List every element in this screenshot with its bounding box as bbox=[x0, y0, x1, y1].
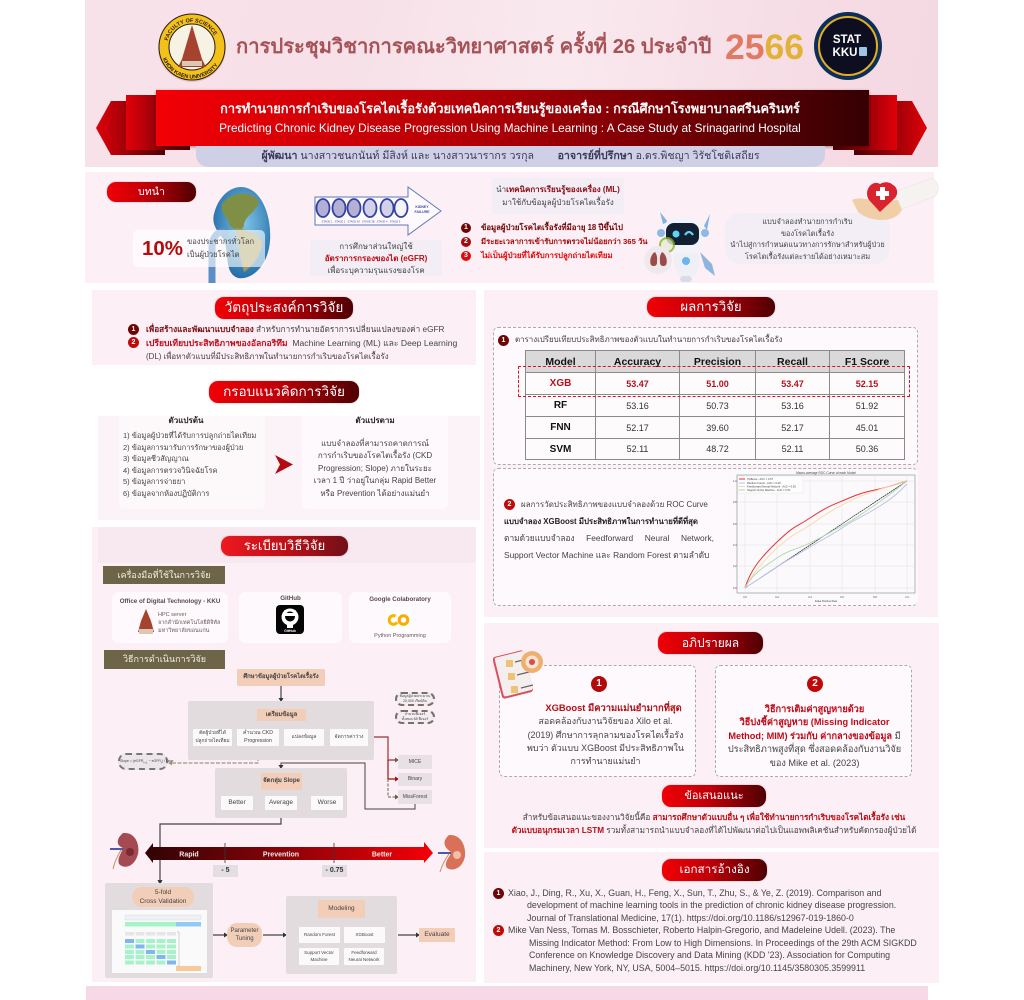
box: study CKD data: ศึกษาข้อมูลผู้ป่วยโรคไตเรื้อรัง bbox=[243, 674, 319, 680]
group: worse bbox=[311, 796, 343, 810]
panel: modeling bbox=[286, 896, 397, 974]
results table: 50.73 bbox=[706, 400, 729, 410]
heading: conceptual framework: กรอบแนวคิดการวิจัย bbox=[223, 384, 345, 399]
HPC text: มหาวิทยาลัยขอนแก่น bbox=[158, 628, 209, 634]
chart: ROC curve: 0.0 bbox=[743, 595, 747, 599]
model: SVM: Support Vector bbox=[304, 950, 334, 955]
model: SVM bbox=[299, 948, 339, 965]
heading band bbox=[98, 527, 476, 563]
heading: introduction: บทนำ bbox=[138, 186, 165, 198]
icon: diseased kidney bbox=[110, 833, 138, 870]
results table: 53.47 bbox=[781, 378, 804, 388]
diagram: k-fold bbox=[112, 910, 207, 973]
logo: STAT KKU bbox=[814, 12, 882, 80]
discussion text: สอดคล้องกับงานวิจัยของ Xilo et al. bbox=[538, 716, 673, 726]
results table: 52.17 bbox=[781, 422, 804, 432]
reference text: Missing Indicator Method: From Low to High Dimensions. In Proceedings of the 29th ACM SIGKDD bbox=[529, 938, 917, 948]
callout: model outcome bbox=[725, 213, 890, 264]
header panel bbox=[85, 0, 938, 167]
data source 1: ข้อมูลผู้ป่วยประมาณ bbox=[400, 694, 430, 698]
HPC text: HPC server bbox=[158, 612, 186, 618]
threshold -5: - 5 bbox=[221, 867, 230, 874]
label: จัดกลุ่ม Slope bbox=[263, 778, 300, 784]
label: Modeling bbox=[328, 905, 355, 912]
number badge bbox=[128, 324, 139, 335]
method: MICE bbox=[398, 755, 432, 769]
results table: Model bbox=[545, 356, 576, 368]
results table: F1 Score bbox=[845, 356, 889, 368]
criterion 3: 3 bbox=[464, 252, 468, 259]
variable list: 1) ข้อมูลผู้ป่วยที่ได้รับการปลูกถ่ายไตเทียม bbox=[123, 431, 256, 440]
box: dependent variable bbox=[302, 416, 448, 509]
label: 5-fold bbox=[155, 889, 171, 896]
step: compute progression bbox=[237, 729, 279, 746]
reference text: Journal of Translational Medicine, 17(1). https://doi.org/10.1186/s12967-019-1860-0 bbox=[527, 913, 854, 923]
criterion 2: 2 bbox=[464, 238, 468, 245]
heading: results: ผลการวิจัย bbox=[680, 299, 742, 314]
logo: STAT KKU: KKU bbox=[833, 47, 857, 59]
recommendation text: สำหรับข้อเสนอแนะของงานวิจัยนี้คือ สามารถศึกษาตัวแบบอื่น ๆ เพื่อใช้ทำนายการกำเริบของโรคไตเรื้อรัง เช่น bbox=[523, 813, 905, 822]
label bbox=[257, 709, 306, 721]
box: evaluate: Evaluate bbox=[424, 931, 450, 938]
label bbox=[318, 900, 365, 918]
dependent text: Progression; Slope) ภายในระยะ bbox=[318, 464, 432, 473]
table caption: ตารางเปรียบเทียบประสิทธิภาพของตัวแบบในทำนายการกำเริบของโรคไตเรื้อรัง bbox=[515, 335, 783, 344]
results table: FNN bbox=[550, 422, 571, 433]
number badge: 1 bbox=[497, 890, 500, 897]
method: MissForest bbox=[398, 790, 432, 804]
results table: 53.47 bbox=[626, 378, 649, 388]
chart: ROC curve: 0.4 bbox=[808, 595, 812, 599]
results table: Recall bbox=[777, 356, 808, 368]
discussion text: การทำนายแม่นยำ bbox=[570, 756, 641, 766]
heading: recommendations bbox=[662, 785, 766, 807]
group: worse: Worse bbox=[318, 799, 336, 806]
statistic caption: เป็นผู้ป่วยโรคไต bbox=[187, 250, 240, 259]
callout: machine learning bbox=[492, 178, 624, 214]
icon: colab bbox=[388, 614, 410, 626]
panel: discussion bbox=[484, 623, 939, 848]
reference text bbox=[508, 888, 896, 923]
callout: eGFR: เพื่อระบุความรุนแรงของโรค bbox=[327, 266, 425, 275]
line 1: 2 bbox=[508, 501, 511, 508]
chart: ROC curve bbox=[733, 470, 918, 603]
results table: 48.72 bbox=[706, 444, 729, 454]
number badge bbox=[807, 676, 823, 692]
step: exclude bbox=[193, 729, 232, 746]
conference title: การประชุมวิชาการคณะวิทยาศาสตร์ ครั้งที่ 26 ประจำปี bbox=[236, 36, 711, 58]
card caption: Python Programming bbox=[374, 633, 426, 639]
criterion 3 bbox=[461, 250, 613, 261]
group: better: Better bbox=[228, 799, 246, 806]
box: study CKD data bbox=[237, 669, 325, 686]
recommendation text: ตัวแบบอนุกรมเวลา LSTM รวมทั้งสามารถนำแบบจำลองที่ได้ไปพัฒนาต่อไปเป็นแอพพลิเคชันสำหรับคัดกรองผู้ป่วยได้ bbox=[512, 826, 916, 835]
chart: slope scale arrow: Better bbox=[372, 852, 392, 858]
criteria list bbox=[461, 222, 648, 261]
panel: methodology bbox=[92, 527, 476, 982]
card heading: Google Colaboratory bbox=[369, 596, 431, 603]
step: missing values: จัดการค่าว่าง bbox=[335, 734, 363, 740]
objective 2 bbox=[128, 337, 457, 360]
icon: clipboard target bbox=[493, 650, 543, 699]
chart: ROC curve: 0.6 bbox=[733, 522, 737, 526]
panel: introduction bbox=[85, 172, 934, 283]
chart: ROC curve: 1.0 bbox=[905, 595, 909, 599]
step: exclude: ปลูกถ่ายไตเทียม bbox=[195, 738, 230, 744]
line 4: Support Vector Machine และ Random Forest ตามลำดับ bbox=[504, 550, 709, 560]
callout: eGFR: การศึกษาส่วนใหญ่ใช้ bbox=[339, 242, 413, 251]
chart: slope scale arrow: Prevention bbox=[263, 852, 299, 858]
results table: Accuracy bbox=[614, 356, 661, 368]
diagram: CKD stages arrow: KIDNEY bbox=[415, 205, 429, 209]
chart: ROC curve: Support Vector Machine - AUC = 0.51 bbox=[747, 488, 791, 492]
results table: RF bbox=[554, 400, 567, 411]
reference text: Xiao, J., Ding, R., Xu, X., Guan, H., Feng, X., Sun, T., Zhu, S., & Ye, Z. (2019). Comparison and bbox=[508, 888, 881, 898]
reference 2 bbox=[493, 925, 917, 973]
number badge bbox=[591, 676, 607, 692]
callout: 10 percent bbox=[133, 230, 265, 267]
label: เตรียมข้อมูล bbox=[266, 712, 297, 718]
card heading: Office of Digital Technology - KKU bbox=[120, 598, 220, 605]
reference text: Machinery, New York, NY, USA, 5004–5015. https://doi.org/10.1145/3580305.3599911 bbox=[529, 962, 865, 972]
objective text bbox=[146, 338, 457, 360]
chart: ROC curve: Random Forest - AUC = 0.49 bbox=[747, 481, 781, 485]
statistic 10%: 10% bbox=[142, 237, 183, 260]
callout: model outcome: นำไปสู่การกำหนดแนวทางการรักษาสำหรับผู้ป่วย bbox=[730, 240, 885, 249]
heading: ตัวแปรต้น bbox=[169, 416, 203, 425]
HPC text: จากสำนักเทคโนโลยีดิจิทัล bbox=[158, 620, 220, 626]
tag: procedure bbox=[104, 650, 225, 669]
dependent text: หรือ Prevention ได้อย่างแม่นยำ bbox=[320, 489, 430, 498]
diagram: CKD stages arrow: STAGE 1 STAGE 2 STAGE 3A STAGE 3B STAGE 4 STAGE 5 bbox=[322, 220, 401, 224]
label bbox=[132, 887, 194, 907]
method: MissForest: MissForest bbox=[403, 794, 427, 800]
discussion text: ของ Mike et al. (2023) bbox=[770, 758, 859, 768]
tag: procedure: วิธีการดำเนินการวิจัย bbox=[123, 654, 206, 664]
group: average bbox=[265, 796, 297, 810]
threshold -0.75 bbox=[322, 865, 347, 877]
variable list: 6) ข้อมูลจากห้องปฏิบัติการ bbox=[123, 489, 209, 498]
tag: tools: เครื่องมือที่ใช้ในการวิจัย bbox=[118, 570, 210, 580]
discussion card 2 bbox=[715, 665, 912, 777]
line 2: แบบจำลอง XGBoost มีประสิทธิภาพในการทำนายที่ดีที่สุด bbox=[504, 517, 698, 526]
discussion text: พบว่า ตัวแบบ XGBoost มีประสิทธิภาพใน bbox=[527, 743, 684, 753]
results table bbox=[525, 350, 905, 460]
model: SVM: Machine bbox=[310, 956, 328, 962]
model: XGBoost: XGBoost bbox=[355, 932, 374, 937]
logo: STAT KKU: STAT bbox=[833, 34, 861, 46]
method: Binary bbox=[398, 773, 432, 786]
label: Cross Validation bbox=[140, 898, 186, 905]
chart: ROC curve: Feedforward Neural Network - AUC = 0.55 bbox=[747, 484, 796, 488]
chart: ROC curve: XGBoost - AUC = 0.57 bbox=[747, 477, 774, 481]
box: parameter tuning: Parameter bbox=[230, 928, 258, 934]
discussion text: วิธีการเติมค่าสูญหายด้วย bbox=[765, 704, 864, 714]
results table: 50.36 bbox=[856, 444, 878, 454]
variable list: 3) ข้อมูลชีวสัญญาณ bbox=[123, 454, 189, 463]
reference 1 bbox=[493, 888, 896, 923]
variable list: 5) ข้อมูลการจ่ายยา bbox=[123, 477, 185, 486]
dependent text bbox=[314, 438, 436, 498]
heading: objectives: วัตถุประสงค์การวิจัย bbox=[225, 300, 343, 315]
chart: ROC curve: 0.8 bbox=[733, 500, 737, 504]
model: random forest bbox=[299, 927, 340, 943]
objective text: เปรียบเทียบประสิทธิภาพของอัลกอริทึม Machine Learning (ML) และ Deep Learning bbox=[146, 338, 457, 348]
heading: ตัวแปรตาม bbox=[355, 416, 395, 425]
data source 2: ทั้งหมด 68 ฟีเจอร์ bbox=[402, 717, 428, 721]
chart: ROC curve: False Positive Rate bbox=[815, 599, 838, 603]
panel: references bbox=[484, 852, 939, 983]
panel: cross validation bbox=[105, 883, 213, 978]
panel: data preparation bbox=[188, 701, 374, 760]
step: compute progression: คำนวณ CKD bbox=[243, 730, 273, 736]
discussion text: วิธีบ่งชี้ค่าสูญหาย (Missing Indicator bbox=[740, 717, 889, 727]
tag: tools bbox=[103, 566, 225, 584]
method: Binary: Binary bbox=[408, 776, 422, 782]
Thai title: การทำนายการกำเริบของโรคไตเรื้อรังด้วยเทคนิคการเรียนรู้ของเครื่อง : กรณีศึกษาโรงพยาบาลศรีนครินทร์ bbox=[220, 101, 800, 116]
chart: slope scale arrow bbox=[145, 842, 433, 863]
results table: Precision bbox=[694, 356, 741, 368]
box: evaluate bbox=[419, 928, 455, 942]
icon: github bbox=[276, 605, 304, 634]
logo: Faculty of Science: FACULTY OF SCIENCE bbox=[164, 18, 218, 40]
criterion 2: มีระยะเวลาการเข้ารับการตรวจไม่น้อยกว่า 365 วัน bbox=[481, 237, 648, 246]
results table: 52.15 bbox=[856, 378, 878, 388]
card: GitHub bbox=[239, 592, 342, 643]
objective 1 bbox=[128, 323, 444, 335]
threshold -5 bbox=[213, 865, 238, 877]
step: missing values bbox=[330, 729, 368, 746]
reference text: Mike Van Ness, Tomas M. Bosschieter, Roberto Halpin-Gregorio, and Madeleine Udell. (2023). The bbox=[508, 925, 895, 935]
discussion text: XGBoost มีความแม่นยำมากที่สุด bbox=[545, 702, 682, 713]
step: exclude: ตัดผู้ป่วยที่ได้ bbox=[199, 731, 226, 736]
discussion text: Method; MIM) ร่วมกับ ค่ากลางของข้อมูล มี bbox=[728, 731, 901, 741]
icon: hand with heart bbox=[852, 178, 938, 220]
icon: globe kidney bbox=[208, 187, 270, 283]
objective text: (DL) เพื่อหาตัวแบบที่มีประสิทธิภาพในทำนายการกำเริบของโรคไตเรื้อรัง bbox=[146, 352, 389, 360]
discussion text: (2019) ศึกษาการลุกลามของโรคไตเรื้อรัง bbox=[528, 730, 683, 740]
results table: 53.16 bbox=[626, 400, 649, 410]
icon: healthy kidney bbox=[438, 835, 466, 872]
number badge: 2 bbox=[132, 339, 135, 346]
threshold -0.75: - 0.75 bbox=[326, 867, 343, 874]
dependent text: การกำเริบของโรคไตเรื้อรัง (CKD bbox=[318, 451, 432, 460]
results table: SVM bbox=[550, 444, 571, 454]
footer strip bbox=[86, 986, 928, 1000]
reference text: Conference on Knowledge Discovery and Data Mining (KDD '23). Association for Computing bbox=[529, 950, 890, 960]
table caption: 1 bbox=[502, 337, 505, 344]
logo: Faculty of Science bbox=[158, 14, 226, 82]
diagram: CKD stages arrow bbox=[314, 186, 442, 236]
heading: recommendations: ข้อเสนอแนะ bbox=[684, 790, 744, 802]
heading: references bbox=[662, 859, 767, 881]
number badge: 1 bbox=[596, 678, 602, 689]
panel: slope grouping bbox=[215, 768, 347, 818]
reference text: development of machine learning tools in the prediction of chronic kidney disease progression. bbox=[527, 900, 896, 910]
panel: conceptual framework bbox=[98, 416, 480, 520]
heading: conceptual framework bbox=[209, 381, 359, 403]
heading: discussion bbox=[658, 632, 763, 654]
arrow bbox=[275, 455, 293, 474]
model: FNN: Neural Network bbox=[348, 956, 380, 962]
objective text: เพื่อสร้างและพัฒนาแบบจำลอง สำหรับการทำนายอัตราการเปลี่ยนแปลงของค่า eGFR bbox=[146, 325, 444, 334]
step: transform bbox=[284, 729, 324, 746]
callout: eGFR: อัตราการกรองของไต (eGFR) bbox=[325, 254, 427, 263]
results table: 52.17 bbox=[626, 422, 649, 432]
model: FNN bbox=[344, 948, 384, 965]
chart: ROC curve: 0.8 bbox=[873, 595, 877, 599]
results table: 53.16 bbox=[781, 400, 804, 410]
criterion 1: ข้อมูลผู้ป่วยโรคไตเรื้อรังที่มีอายุ 18 ปีขึ้นไป bbox=[481, 223, 623, 232]
formula pill: Slope = (eGFRt+1 − eGFRt) / Time bbox=[120, 759, 173, 765]
icon: robot with kidney bbox=[644, 212, 715, 282]
chart: ROC curve: Macro-average ROC Curve of each Model bbox=[796, 471, 856, 475]
authors bar: ผู้พัฒนา นางสาวชนกนันท์ มีสิงห์ และ นางสาวนารากร วรกุล อาจารย์ที่ปรึกษา อ.ดร.พิชญา วิรัชโชติเสถียร bbox=[261, 150, 760, 162]
heading: discussion: อภิปรายผล bbox=[682, 636, 739, 650]
heading: methodology: ระเบียบวิธีวิจัย bbox=[244, 538, 325, 553]
title banner bbox=[156, 90, 869, 146]
number badge bbox=[493, 925, 504, 936]
variable list: 4) ข้อมูลการตรวจวินิจฉัยโรค bbox=[123, 466, 218, 475]
logo: Faculty of Science: KHON KAEN UNIVERSITY bbox=[162, 57, 217, 79]
dependent text: แบบจำลองที่สามารถคาดการณ์ bbox=[321, 439, 429, 448]
title ribbon bbox=[96, 95, 927, 155]
heading: methodology bbox=[221, 536, 348, 556]
HPC text bbox=[158, 612, 220, 634]
variable list: 2) ข้อมูลการมารับการรักษาของผู้ป่วย bbox=[123, 443, 243, 452]
line 3: ตามด้วยแบบจำลอง Feedforward Neural Network, bbox=[504, 533, 714, 543]
heading: references: เอกสารอ้างอิง bbox=[679, 863, 750, 876]
discussion text: ประสิทธิภาพสูงที่สุด ซึ่งสอดคล้องกับงานวิจัย bbox=[728, 744, 901, 754]
chart: ROC curve: 0.0 bbox=[733, 586, 737, 590]
diagram: CKD stages arrow: FAILURE bbox=[415, 210, 430, 214]
chart: ROC curve: 0.2 bbox=[775, 595, 779, 599]
variable list bbox=[123, 430, 256, 498]
number badge: 2 bbox=[497, 927, 500, 934]
step: compute progression: Progression bbox=[244, 738, 272, 744]
reference text bbox=[508, 924, 917, 974]
card: Google Colab bbox=[349, 592, 451, 643]
number badge: 1 bbox=[132, 326, 135, 333]
group: average: Average bbox=[269, 799, 293, 806]
results table: 52.11 bbox=[627, 444, 648, 454]
model: FNN: Feedforward bbox=[351, 950, 377, 955]
card heading: GitHub bbox=[280, 595, 301, 602]
discussion text bbox=[527, 701, 684, 766]
statistic caption: ของประชากรทั่วโลก bbox=[187, 237, 254, 246]
heading: introduction bbox=[107, 182, 196, 202]
chart: ROC curve: 1.0 bbox=[733, 479, 737, 483]
results table: 45.01 bbox=[856, 422, 878, 432]
dashed box: ROC section bbox=[493, 468, 918, 606]
chart: ROC curve: 0.6 bbox=[840, 595, 844, 599]
number badge: 2 bbox=[812, 678, 818, 689]
dependent text: เวลา 1 ปี ว่าอยู่ในกลุ่ม Rapid Better bbox=[314, 476, 436, 485]
results table: XGB bbox=[550, 378, 571, 389]
dashed box: table section bbox=[493, 327, 918, 465]
step: transform: แปลงข้อมูล bbox=[292, 734, 316, 740]
callout: machine learning: มาใช้กับข้อมูลผู้ป่วยโรคไตเรื้อรัง bbox=[502, 198, 614, 206]
panel: objectives bbox=[92, 290, 476, 365]
results table: 39.60 bbox=[706, 422, 729, 432]
discussion text bbox=[728, 704, 901, 768]
data source 2 bbox=[395, 710, 435, 724]
label bbox=[261, 773, 302, 790]
callout: model outcome: โรคไตเรื้อรังแต่ละรายได้อย่างเหมาะสม bbox=[745, 252, 870, 260]
callout: eGFR bbox=[310, 240, 442, 276]
box: independent variables bbox=[119, 416, 265, 509]
callout: model outcome: แบบจำลองทำนายการกำเริบ bbox=[762, 217, 853, 226]
statistic caption bbox=[187, 236, 254, 259]
chart: slope scale arrow: Rapid bbox=[179, 852, 199, 858]
table caption bbox=[498, 334, 783, 346]
ROC description bbox=[504, 499, 714, 560]
highlight: best model bbox=[518, 366, 910, 397]
criterion 1 bbox=[461, 222, 623, 233]
data source 1: 20,000 เรียน์ดิม bbox=[403, 699, 427, 703]
icon: KKU temple bbox=[138, 609, 154, 634]
results table: 51.92 bbox=[856, 400, 878, 410]
number badge bbox=[128, 337, 139, 348]
recommendation text bbox=[512, 811, 916, 836]
English title: Predicting Chronic Kidney Disease Progression Using Machine Learning : A Case Study at Srinagarind Hospital bbox=[219, 121, 801, 135]
results table: 52.11 bbox=[782, 444, 803, 454]
model: random forest: Random Forest bbox=[304, 932, 335, 937]
method: MICE: MICE bbox=[409, 759, 421, 765]
box: parameter tuning: Tuning bbox=[235, 936, 254, 942]
callout: machine learning: นำเทคนิคการเรียนรู้ของเครื่อง (ML) bbox=[496, 185, 620, 194]
formula pill bbox=[118, 753, 168, 770]
data source 2: จำนวนฟีเจอร์ bbox=[405, 712, 425, 716]
group: better bbox=[221, 796, 253, 810]
heading: results bbox=[647, 297, 775, 317]
data source 1 bbox=[395, 692, 435, 706]
criterion 3: ไม่เป็นผู้ป่วยที่ได้รับการปลูกถ่ายไตเทียม bbox=[481, 251, 613, 260]
icon: github: GitHub bbox=[284, 629, 296, 633]
card: office of digital technology bbox=[112, 592, 228, 643]
discussion card 1 bbox=[499, 665, 696, 777]
conference year 2566: 2566 bbox=[725, 27, 804, 67]
number badge bbox=[493, 888, 504, 899]
panel: results bbox=[484, 290, 938, 617]
chart: ROC curve: 0.2 bbox=[733, 564, 737, 568]
model: XGBoost bbox=[344, 927, 385, 943]
box: parameter tuning bbox=[227, 923, 262, 947]
criterion 1: 1 bbox=[464, 224, 468, 231]
chart: ROC curve: 0.4 bbox=[733, 543, 737, 547]
line 1: ผลการวัดประสิทธิภาพของแบบจำลองด้วย ROC Curve bbox=[521, 500, 708, 509]
results table: 51.00 bbox=[706, 378, 729, 388]
authors bar bbox=[196, 146, 825, 167]
callout: model outcome: ของโรคไตเรื้อรัง bbox=[781, 228, 834, 238]
heading: objectives bbox=[215, 297, 353, 319]
